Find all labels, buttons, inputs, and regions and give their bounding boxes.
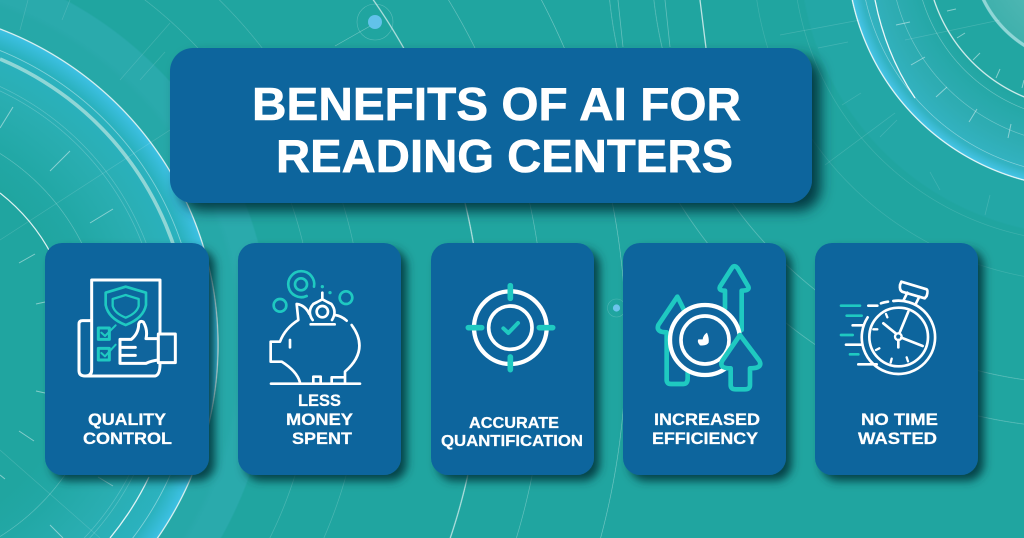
label: EFFICIENCY xyxy=(652,430,758,448)
icon: stopwatch with speed lines xyxy=(841,282,935,374)
icon: clock with upward arrows xyxy=(658,266,760,389)
label: WASTED xyxy=(858,430,937,448)
label xyxy=(652,411,760,448)
label: NO TIME xyxy=(861,411,938,429)
label xyxy=(441,415,583,450)
panel: quality control xyxy=(45,243,209,475)
heading: title text: BENEFITS OF AI FOR xyxy=(252,78,741,130)
label: SPENT xyxy=(292,430,352,448)
panel: less money spent xyxy=(238,243,401,475)
icon: target with check xyxy=(468,286,553,370)
panel: accurate quantification xyxy=(431,243,594,475)
dot: top xyxy=(357,4,393,40)
icon: checklist and thumbs up xyxy=(79,280,175,376)
label: MONEY xyxy=(286,411,353,429)
panel: increased efficiency xyxy=(623,243,786,475)
dot: middle xyxy=(608,299,626,317)
heading: title text: READING CENTERS xyxy=(276,130,733,182)
label: ACCURATE xyxy=(469,415,559,432)
label: LESS xyxy=(298,392,341,410)
label: CONTROL xyxy=(83,430,172,448)
label xyxy=(286,392,353,448)
label: INCREASED xyxy=(654,411,760,429)
heading: title text xyxy=(252,78,741,182)
label xyxy=(83,411,172,448)
label: QUALITY xyxy=(88,411,166,429)
icon: piggy bank with coins xyxy=(271,271,360,384)
panel: no time wasted xyxy=(815,243,978,475)
panel: title xyxy=(170,48,812,203)
label xyxy=(858,411,938,448)
label: QUANTIFICATION xyxy=(441,433,583,450)
